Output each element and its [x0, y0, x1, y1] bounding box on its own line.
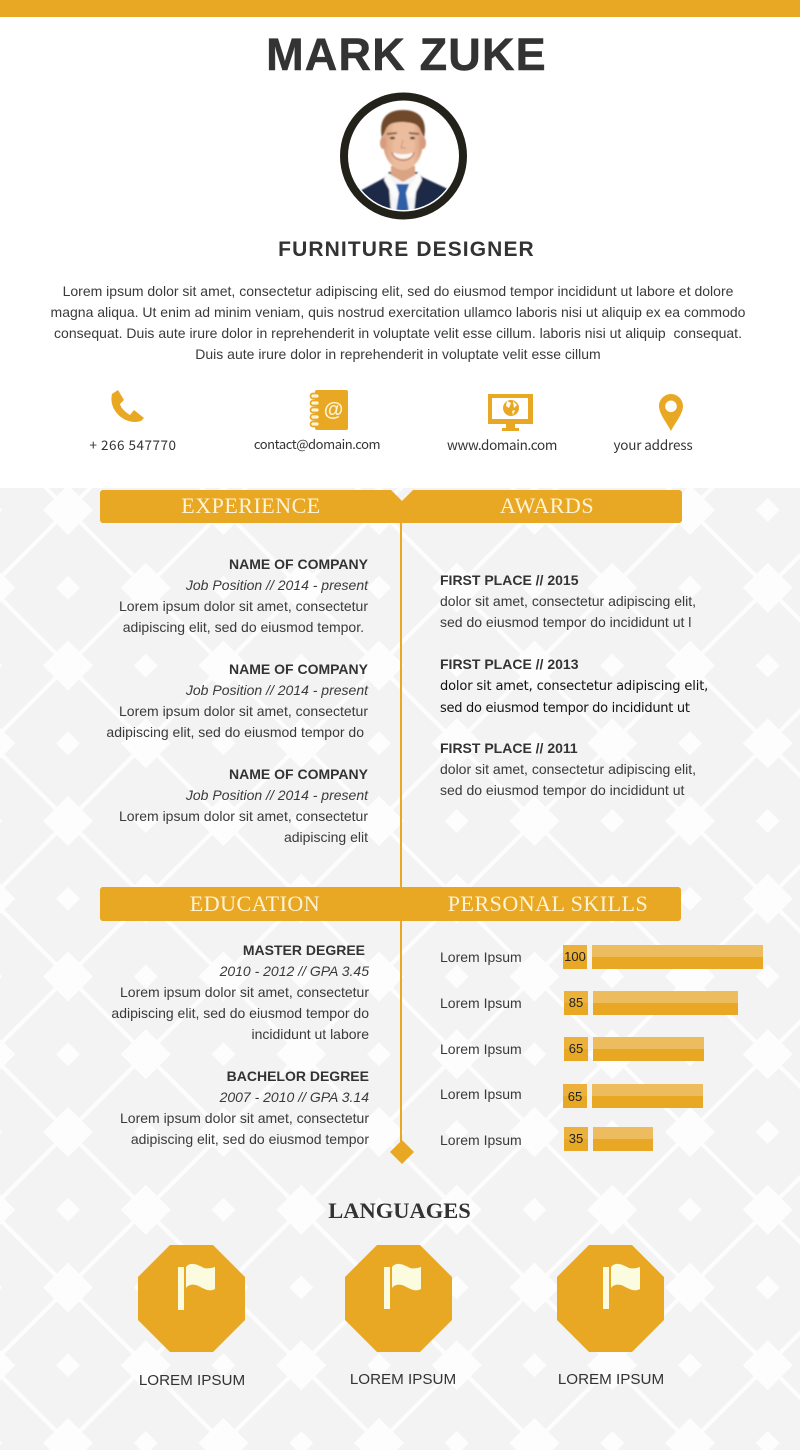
timeline end diamond	[390, 1140, 414, 1164]
education entry: bachelor: Lorem ipsum dolor sit amet, consectetur	[120, 1110, 369, 1126]
education entry: master: adipiscing elit, sed do eiusmod tempor do	[111, 1005, 369, 1021]
contact: email: contact@domain.com	[254, 434, 380, 453]
contact: address: your address	[613, 434, 693, 454]
languages heading: LANGUAGES	[328, 1198, 471, 1223]
experience entry 3: Job Position // 2014 - present	[186, 787, 368, 803]
language badge 1	[138, 1245, 245, 1352]
experience entry 1: Lorem ipsum dolor sit amet, consectetur	[119, 598, 368, 614]
experience entry 3: adipiscing elit	[284, 829, 368, 845]
header band: education and skills	[100, 887, 681, 921]
award 1: dolor sit amet, consectetur adipiscing elit,	[440, 593, 696, 609]
icon: monitor	[488, 394, 533, 431]
award 2	[440, 656, 708, 716]
heading: experience: EXPERIENCE	[181, 493, 321, 518]
header band: experience and awards	[100, 490, 682, 523]
experience entry 1: NAME OF COMPANY	[229, 556, 368, 572]
education entry: bachelor: 2007 - 2010 // GPA 3.14	[220, 1089, 369, 1105]
skill row 5: 35	[569, 1131, 583, 1146]
skill row 5	[440, 1127, 653, 1151]
education entry: master: incididunt ut labore	[251, 1026, 369, 1042]
experience entry 3: Lorem ipsum dolor sit amet, consectetur	[119, 808, 368, 824]
skill row 1: 100	[564, 949, 586, 964]
education entry: bachelor: BACHELOR DEGREE	[227, 1068, 369, 1084]
intro paragraph: consequat. Duis aute irure dolor in reprehenderit in voluptate velit esse cillum. laboris nisi ut aliquip consequat.	[54, 325, 742, 341]
experience entry 2: NAME OF COMPANY	[229, 661, 368, 677]
skill row 3	[440, 1037, 704, 1061]
experience entry 1: adipiscing elit, sed do eiusmod tempor.	[123, 619, 364, 635]
language label 3: LOREM IPSUM	[558, 1371, 664, 1388]
icon: address book	[310, 390, 348, 430]
education entry: master: Lorem ipsum dolor sit amet, consectetur	[120, 984, 369, 1000]
language badge 3	[557, 1245, 664, 1352]
award 1	[440, 572, 696, 630]
heading: awards: AWARDS	[500, 493, 594, 518]
icon: phone	[111, 390, 144, 422]
heading: personal skills: PERSONAL SKILLS	[448, 891, 648, 916]
patterned background	[0, 488, 800, 1450]
skill row 2	[440, 991, 738, 1015]
experience entry 1	[119, 556, 368, 635]
skill row 3: Lorem Ipsum	[440, 1041, 522, 1057]
award 3: FIRST PLACE // 2011	[440, 740, 578, 756]
experience entry 2: Job Position // 2014 - present	[186, 682, 368, 698]
top accent bar	[0, 0, 800, 17]
award 3: dolor sit amet, consectetur adipiscing elit,	[440, 761, 696, 777]
skill row 1: Lorem Ipsum	[440, 949, 522, 965]
icon: address book: @	[324, 399, 343, 421]
intro paragraph: magna aliqua. Ut enim ad minim veniam, quis nostrud exercitation ullamco laboris nisi ut aliquip ex ea commodo	[51, 304, 745, 320]
award 3: sed do eiusmod tempor do incididunt ut	[440, 782, 684, 798]
education entry: bachelor	[120, 1068, 369, 1147]
education entry: master	[111, 942, 369, 1042]
contact: phone: + 266 547770	[90, 434, 176, 454]
timeline line	[400, 523, 402, 1148]
skill row 4: Lorem Ipsum	[440, 1086, 522, 1102]
language badge 2	[345, 1245, 452, 1352]
intro paragraph: Lorem ipsum dolor sit amet, consectetur adipiscing elit, sed do eiusmod tempor incididunt ut labore et dolore	[63, 283, 733, 299]
skill row 1	[440, 945, 763, 969]
intro paragraph: Duis aute irure dolor in reprehenderit in voluptate velit esse cillum	[195, 346, 601, 362]
skill row 3: 65	[569, 1041, 583, 1056]
language label 2: LOREM IPSUM	[350, 1371, 456, 1388]
heading: education: EDUCATION	[190, 891, 320, 916]
skill row 4: 65	[568, 1089, 582, 1104]
experience entry 2: adipiscing elit, sed do eiusmod tempor do	[106, 724, 364, 740]
education entry: bachelor: adipiscing elit, sed do eiusmod tempor	[131, 1131, 369, 1147]
portrait photo in ring	[340, 92, 467, 220]
award 2: FIRST PLACE // 2013	[440, 656, 578, 672]
contact: website: www.domain.com	[447, 434, 557, 454]
education entry: master: 2010 - 2012 // GPA 3.45	[220, 963, 369, 979]
intro paragraph	[51, 283, 745, 362]
skill row 2: Lorem Ipsum	[440, 995, 522, 1011]
award 2: sed do eiusmod tempor do incididunt ut	[440, 701, 690, 716]
icon: location pin	[659, 394, 683, 431]
award 2: dolor sit amet, consectetur adipiscing elit,	[440, 679, 708, 694]
award 3	[440, 740, 696, 798]
experience entry 1: Job Position // 2014 - present	[186, 577, 368, 593]
education entry: master: MASTER DEGREE	[243, 942, 365, 958]
award 1: sed do eiusmod tempor do incididunt ut l	[440, 614, 691, 630]
experience entry 3	[119, 766, 368, 845]
job title: FURNITURE DESIGNER	[278, 238, 535, 261]
experience entry 2	[106, 661, 368, 740]
experience entry 3: NAME OF COMPANY	[229, 766, 368, 782]
skill row 4	[440, 1084, 703, 1108]
language label 1: LOREM IPSUM	[139, 1372, 245, 1389]
experience entry 2: Lorem ipsum dolor sit amet, consectetur	[119, 703, 368, 719]
skill row 2: 85	[569, 995, 583, 1010]
name title: MARK ZUKE	[266, 29, 547, 80]
skill row 5: Lorem Ipsum	[440, 1132, 522, 1148]
award 1: FIRST PLACE // 2015	[440, 572, 578, 588]
